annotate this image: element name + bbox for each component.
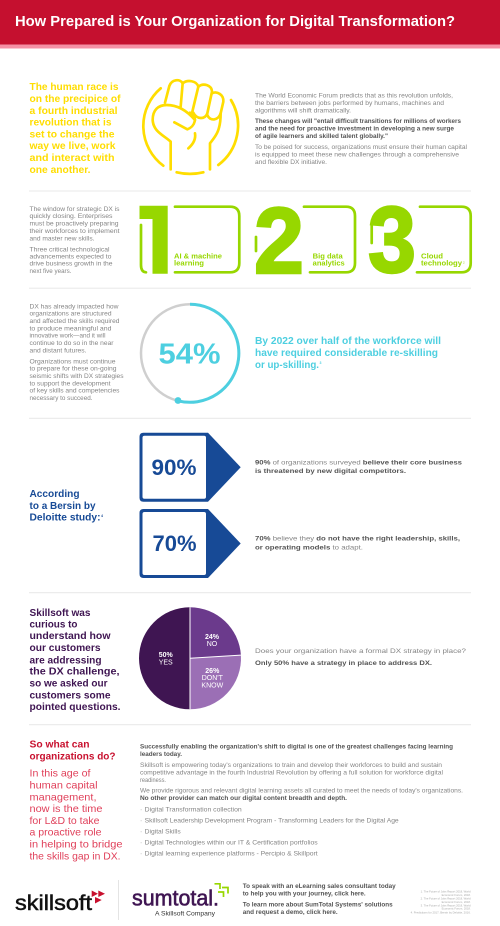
Bersin by Deloitte heading: 4	[101, 514, 103, 518]
So what can organizations do: So what can	[30, 739, 90, 751]
Bersin by Deloitte heading	[30, 488, 103, 524]
contact calls to action: To learn more about SumTotal Systems' solutions	[243, 902, 393, 908]
Bersin by Deloitte heading: Deloitte study:	[30, 512, 100, 524]
Skillsoft survey statement: our customers	[30, 642, 101, 654]
contact calls to action: and request a demo, click here.	[243, 909, 338, 916]
stat tag: 90%: 90%	[152, 455, 196, 480]
Skillsoft offering text: leaders today.	[140, 751, 182, 758]
stat text: 70%	[255, 536, 460, 552]
bullet list of offerings: ·	[140, 839, 142, 846]
Skillsoft offering text: competitive advantage in the fourth Industrial Revolution by offering a full solution for workforce digital	[140, 769, 444, 776]
text: DX impact: and affected the skills required	[30, 318, 120, 325]
Skillsoft offering text: No other provider can match our digital content breadth and depth.	[140, 795, 347, 802]
stat text: 90%: 90% of organizations surveyed believe their core business	[255, 459, 462, 466]
stat text: 70%: or operating models to adapt.	[255, 545, 363, 552]
text: window for strategic DX: advancements expected to	[30, 253, 112, 260]
logo: sumtotal	[132, 884, 228, 918]
text: window for strategic DX: next five years.	[30, 268, 72, 275]
chart: DX strategy pie: DON'T	[202, 675, 224, 682]
Skillsoft offering text: Successfully enabling the organization's shift to digital is one of the greatest challenges facing learning	[140, 744, 453, 751]
footnotes: 1. The Future of Jobs Report 2018, World	[421, 890, 471, 894]
Skillsoft survey statement: Skillsoft was	[30, 607, 91, 619]
Skillsoft offering text: readiness.	[140, 777, 166, 784]
callout: workforce re-skilling: 3	[320, 361, 322, 365]
logo: skillsoft: skillsoft	[15, 892, 92, 915]
chart: DX strategy pie: KNOW	[201, 682, 224, 690]
technology 1: AI and machine learning	[140, 206, 239, 278]
footnotes: Economic Forum, 2018.	[442, 893, 471, 897]
text: window for strategic DX: Three critical technological	[30, 246, 110, 253]
Skillsoft survey statement: curious to	[30, 619, 78, 631]
Skillsoft offering text: We provide rigorous and relevant digital learning assets all curated to meet the needs of today's organizations.	[140, 788, 463, 795]
chart: DX strategy pie: 24%	[205, 634, 220, 641]
text: window for strategic DX: drive business growth in the	[30, 261, 113, 268]
technology 2: big data analytics: 2	[254, 188, 304, 293]
contact calls to action: To speak with an eLearning sales consultant today	[243, 883, 396, 890]
footnotes: 4. Predictions for 2017, Bersin by Deloitte, 2016.	[411, 910, 471, 914]
text: window for strategic DX: quickly closing. Enterprises	[30, 213, 113, 220]
technology 1: AI and machine learning: 1	[153, 256, 167, 278]
intro paragraphs: To be poised for success, organizations must ensure their human capital	[255, 144, 468, 151]
bullet list of offerings: Digital learning experience platforms - Percipio & Skillport	[145, 850, 318, 857]
intro statement: a fourth industrial	[30, 105, 118, 117]
text: DX impact: of key skills and competencies	[30, 388, 120, 395]
bullet list of offerings: Skillsoft Leadership Development Program - Transforming Leaders for the Digital Age	[145, 817, 399, 824]
technology 2: big data analytics: analytics	[313, 261, 345, 268]
Skillsoft survey statement: understand how	[30, 630, 111, 642]
header banner: How Prepared is Your Organization for Digital Transformation?	[15, 14, 455, 30]
technology 3: cloud technology	[368, 187, 471, 292]
text: window for strategic DX: The window for strategic DX is	[30, 206, 120, 213]
Skillsoft survey statement: are addressing	[30, 654, 102, 666]
intro statement: set to change the	[30, 128, 115, 140]
technology 2: big data analytics	[254, 188, 355, 293]
bullet list of offerings: Digital Skills	[145, 828, 181, 835]
Skillsoft survey statement: pointed questions.	[30, 701, 121, 713]
text: DX impact: to produce meaningful and	[30, 325, 112, 332]
stat text: 70%: 70% believe they do not have the right leadership, skills,	[255, 536, 460, 543]
text: DX impact: to support the development	[30, 380, 111, 387]
intro paragraphs: of agile learners and skilled talent globally."	[255, 133, 388, 140]
survey question and answer	[255, 648, 466, 667]
So what can organizations do: human capital	[30, 779, 98, 791]
intro statement: one another.	[30, 164, 91, 176]
text: window for strategic DX: and master new skills.	[30, 235, 95, 242]
bullet list of offerings: ·	[140, 850, 142, 857]
chart: DX strategy pie: NO	[207, 641, 218, 648]
intro paragraphs: and flexible DX initiative.	[255, 159, 327, 166]
technology 3: cloud technology: 2	[463, 260, 465, 264]
chart: DX strategy pie: 26%	[205, 668, 220, 675]
stat text: 90%	[255, 459, 462, 475]
So what can organizations do: for L&D to take	[30, 815, 100, 827]
text: DX impact	[30, 303, 124, 402]
intro statement: The human race is	[30, 81, 119, 93]
intro paragraphs: is equipped to meet these new challenges through a comprehensive	[255, 152, 459, 158]
So what can organizations do: the skills gap in DX.	[30, 850, 120, 862]
intro paragraphs: the barriers between jobs performed by humans, machines and	[255, 100, 444, 107]
Skillsoft survey statement: the DX challenge,	[30, 666, 120, 678]
intro statement: on the precipice of	[30, 93, 121, 105]
survey question and answer: Only 50% have a strategy in place to address DX.	[255, 660, 432, 667]
intro paragraphs: algorithms will shift dramatically.	[255, 108, 351, 114]
technology 1: AI and machine learning: learning	[174, 261, 204, 268]
intro statement: revolution that is	[30, 116, 112, 128]
icon: raised fist in circle	[143, 80, 238, 174]
chart: DX strategy pie: 50%	[159, 652, 173, 659]
callout: workforce re-skilling	[255, 335, 441, 371]
callout: workforce re-skilling: have required considerable re-skilling	[255, 347, 438, 359]
survey question and answer: Does your organization have a formal DX strategy in place?	[255, 648, 466, 655]
stat text: 90%: is threatened by new digital competitors.	[255, 468, 406, 475]
stat tag: 70%: 70%	[152, 531, 196, 556]
footnotes: Economic Forum, 2018.	[442, 900, 471, 904]
chart: 54% progress ring	[141, 304, 239, 404]
bullet list of offerings: ·	[140, 806, 142, 813]
bullet list of offerings	[140, 806, 399, 857]
So what can organizations do: now is the time	[30, 803, 103, 815]
Skillsoft survey statement: so we asked our	[30, 677, 108, 689]
chart: 54% progress ring: 54%	[158, 338, 221, 370]
footnotes: 3. The Future of Jobs Report 2018, World	[421, 903, 471, 907]
Skillsoft survey statement: customers some	[30, 689, 111, 701]
intro statement: way we live, work	[29, 140, 116, 152]
footnotes: Economic Forum, 2018.	[442, 907, 471, 911]
footnotes	[411, 890, 471, 914]
Skillsoft survey statement	[30, 607, 121, 713]
Skillsoft offering text	[140, 744, 463, 802]
So what can organizations do: management,	[30, 791, 96, 803]
text: window for strategic DX: must be proactively preparing	[30, 221, 119, 228]
bullet list of offerings: Digital Transformation collection	[145, 806, 242, 813]
intro paragraphs: The World Economic Forum predicts that as this revolution unfolds,	[255, 92, 453, 100]
intro paragraphs: and the need for proactive investment in developing a new surge	[255, 126, 454, 132]
contact calls to action	[243, 883, 396, 916]
text: DX impact: and distant futures.	[30, 347, 87, 354]
So what can organizations do: In this age of	[30, 767, 91, 779]
intro paragraphs: These changes will "entail difficult transitions for millions of workers	[255, 118, 461, 125]
So what can organizations do: organizations do?	[30, 751, 116, 763]
header banner	[0, 0, 500, 48]
callout: workforce re-skilling: or up-skilling.	[255, 359, 319, 371]
callout: workforce re-skilling: By 2022 over half of the workforce will	[255, 335, 441, 347]
text: DX impact: necessary to succeed.	[30, 395, 93, 402]
stat tag: 90%	[140, 433, 241, 502]
chart: DX strategy pie	[139, 607, 241, 709]
stat tag: 70%	[140, 509, 241, 578]
text: DX impact: innovative work—and it will	[30, 333, 106, 340]
intro paragraphs	[255, 92, 468, 166]
So what can organizations do: in helping to bridge	[30, 838, 123, 850]
bullet list of offerings: ·	[140, 817, 142, 824]
intro statement: and interact with	[30, 152, 114, 164]
So what can organizations do: a proactive role	[30, 827, 102, 839]
So what can organizations do	[30, 739, 123, 862]
text: DX impact: organizations are structured	[30, 311, 112, 318]
text: DX impact: continue to do so in the near	[30, 340, 114, 347]
text: DX impact: DX has already impacted how	[30, 303, 119, 310]
Skillsoft offering text: Skillsoft is empowering today's organizations to train and develop their workforces to build and sustain	[140, 762, 442, 769]
technology 2: big data analytics: Big data	[313, 254, 343, 260]
Bersin by Deloitte heading: According	[30, 488, 80, 500]
text: DX impact: Organizations must continue	[30, 358, 116, 365]
technology 3: cloud technology: technology	[421, 261, 462, 268]
text: DX impact: to prepare for these on-going	[30, 366, 117, 373]
text: window for strategic DX	[30, 206, 120, 275]
Bersin by Deloitte heading: to a Bersin by	[30, 500, 96, 512]
chart: DX strategy pie: YES	[159, 660, 173, 666]
footnotes: 2. The Future of Jobs Report 2018, World	[421, 896, 471, 900]
technology 3: cloud technology: 3	[368, 187, 416, 292]
text: window for strategic DX: their workforces to implement	[30, 228, 120, 235]
bullet list of offerings: Digital Technologies within our IT & Certification portfolios	[145, 839, 318, 846]
logo: sumtotal: A Skillsoft Company	[155, 911, 216, 918]
logo: sumtotal: sumtotal.	[132, 886, 219, 911]
text: DX impact: seismic shifts with DX strategies	[30, 373, 124, 380]
technology 3: cloud technology: Cloud	[421, 254, 443, 260]
intro statement	[29, 81, 121, 176]
bullet list of offerings: ·	[140, 828, 142, 835]
contact calls to action: to help you with your journey, click here.	[243, 890, 366, 898]
technology 1: AI and machine learning: AI & machine	[174, 254, 222, 260]
